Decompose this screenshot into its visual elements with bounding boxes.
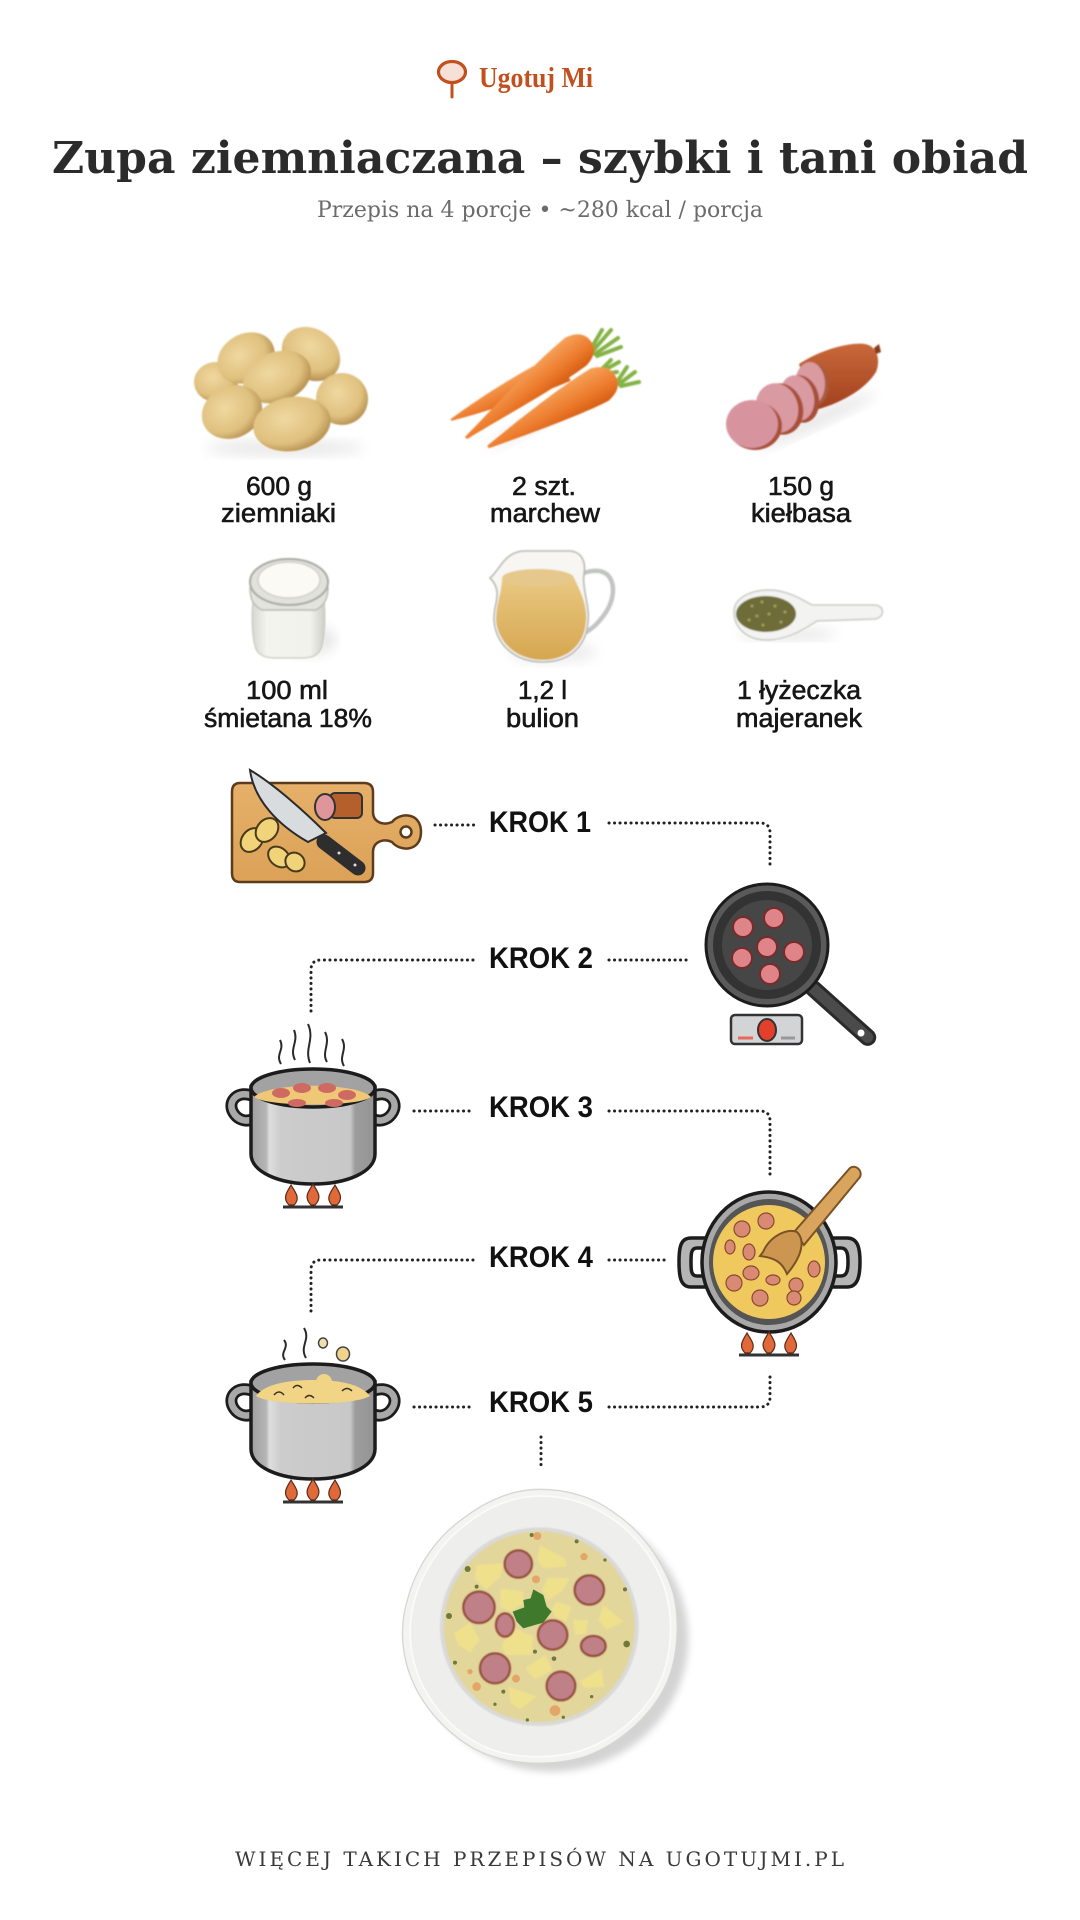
panel: ingredients: [193, 316, 882, 733]
connector: [609, 823, 770, 868]
potato chunks: [454, 1545, 623, 1709]
label: carrots: marchew: [490, 500, 601, 528]
step label: KROK 2: [489, 942, 593, 975]
label: cream: śmietana 18%: [204, 705, 372, 733]
burner: [739, 1332, 799, 1355]
label: marjoram: majeranek: [736, 705, 862, 733]
label: potatoes: ziemniaki: [221, 500, 336, 528]
step label: KROK 4: [489, 1241, 593, 1274]
step 5: [231, 1328, 770, 1502]
step label: KROK 5: [489, 1386, 593, 1419]
icon: marjoram spoon: [734, 590, 882, 640]
label: carrots: [490, 473, 601, 528]
brand logo: [438, 62, 593, 97]
step 1: [232, 770, 770, 882]
wooden spoon: [760, 1167, 861, 1274]
connector: [609, 958, 690, 962]
icon: logo spoon: [438, 62, 466, 97]
herb flecks: [446, 1533, 630, 1722]
connector: [609, 1111, 770, 1175]
label: cream: [204, 677, 372, 733]
icon: pot with wooden spoon: [679, 1167, 861, 1355]
label: potatoes: [221, 473, 336, 528]
icon: frying pan: [706, 884, 870, 1044]
step 2: [311, 884, 870, 1044]
label: broth: bulion: [506, 705, 579, 733]
soup bowl: [403, 1489, 688, 1772]
knife: [250, 770, 358, 868]
connector: [311, 960, 473, 1012]
label: carrots: 2 szt.: [512, 473, 576, 501]
sausage slices: [463, 1550, 606, 1700]
sausage on board: [315, 793, 362, 820]
connector: [414, 1406, 474, 1408]
brand name: Ugotuj Mi: [479, 63, 593, 94]
icon: potatoes: [193, 316, 368, 457]
label: sausage: [751, 473, 852, 528]
icon: simmering pot: [231, 1024, 395, 1207]
label: broth: 1,2 l: [518, 677, 567, 705]
icon: cream jar: [250, 559, 336, 658]
subtitle: Przepis na 4 porcje • ~280 kcal / porcja: [317, 198, 763, 223]
carrot bits: [467, 1532, 588, 1716]
step 4: [311, 1167, 861, 1355]
label: potatoes: 600 g: [246, 473, 312, 501]
soup: [254, 1083, 371, 1107]
connector: [435, 824, 474, 826]
icon: soup pot with cream: [231, 1328, 395, 1502]
icon: broth pitcher: [490, 551, 613, 662]
connector: [609, 1372, 770, 1407]
footer: WIĘCEJ TAKICH PRZEPISÓW NA UGOTUJMI.PL: [235, 1846, 844, 1871]
label: marjoram: 1 łyżeczka: [737, 677, 862, 705]
label: sausage: 150 g: [768, 473, 834, 501]
soup: [256, 1374, 370, 1404]
connector: [414, 1110, 474, 1112]
icon: cutting board: [232, 770, 421, 882]
title: Zupa ziemniaczana – szybki i tani obiad: [52, 133, 1028, 184]
step label: KROK 1: [489, 806, 591, 839]
stove: [731, 1015, 802, 1044]
step 3: [231, 1024, 770, 1207]
burner: [283, 1479, 343, 1502]
parsley: [513, 1589, 552, 1628]
label: broth: [506, 677, 579, 733]
label: marjoram: [736, 677, 862, 733]
step label: KROK 3: [489, 1091, 593, 1124]
panel: steps: [231, 770, 870, 1502]
icon: carrots: [445, 327, 639, 463]
label: cream: 100 ml: [246, 677, 328, 705]
label: sausage: kiełbasa: [751, 500, 852, 528]
icon: sausage: [726, 344, 881, 454]
connector: [540, 1437, 542, 1467]
connector: [311, 1260, 473, 1312]
burner: [283, 1184, 343, 1207]
connector: [609, 1258, 668, 1262]
potato slices: [236, 814, 308, 875]
soup: [444, 1531, 635, 1722]
